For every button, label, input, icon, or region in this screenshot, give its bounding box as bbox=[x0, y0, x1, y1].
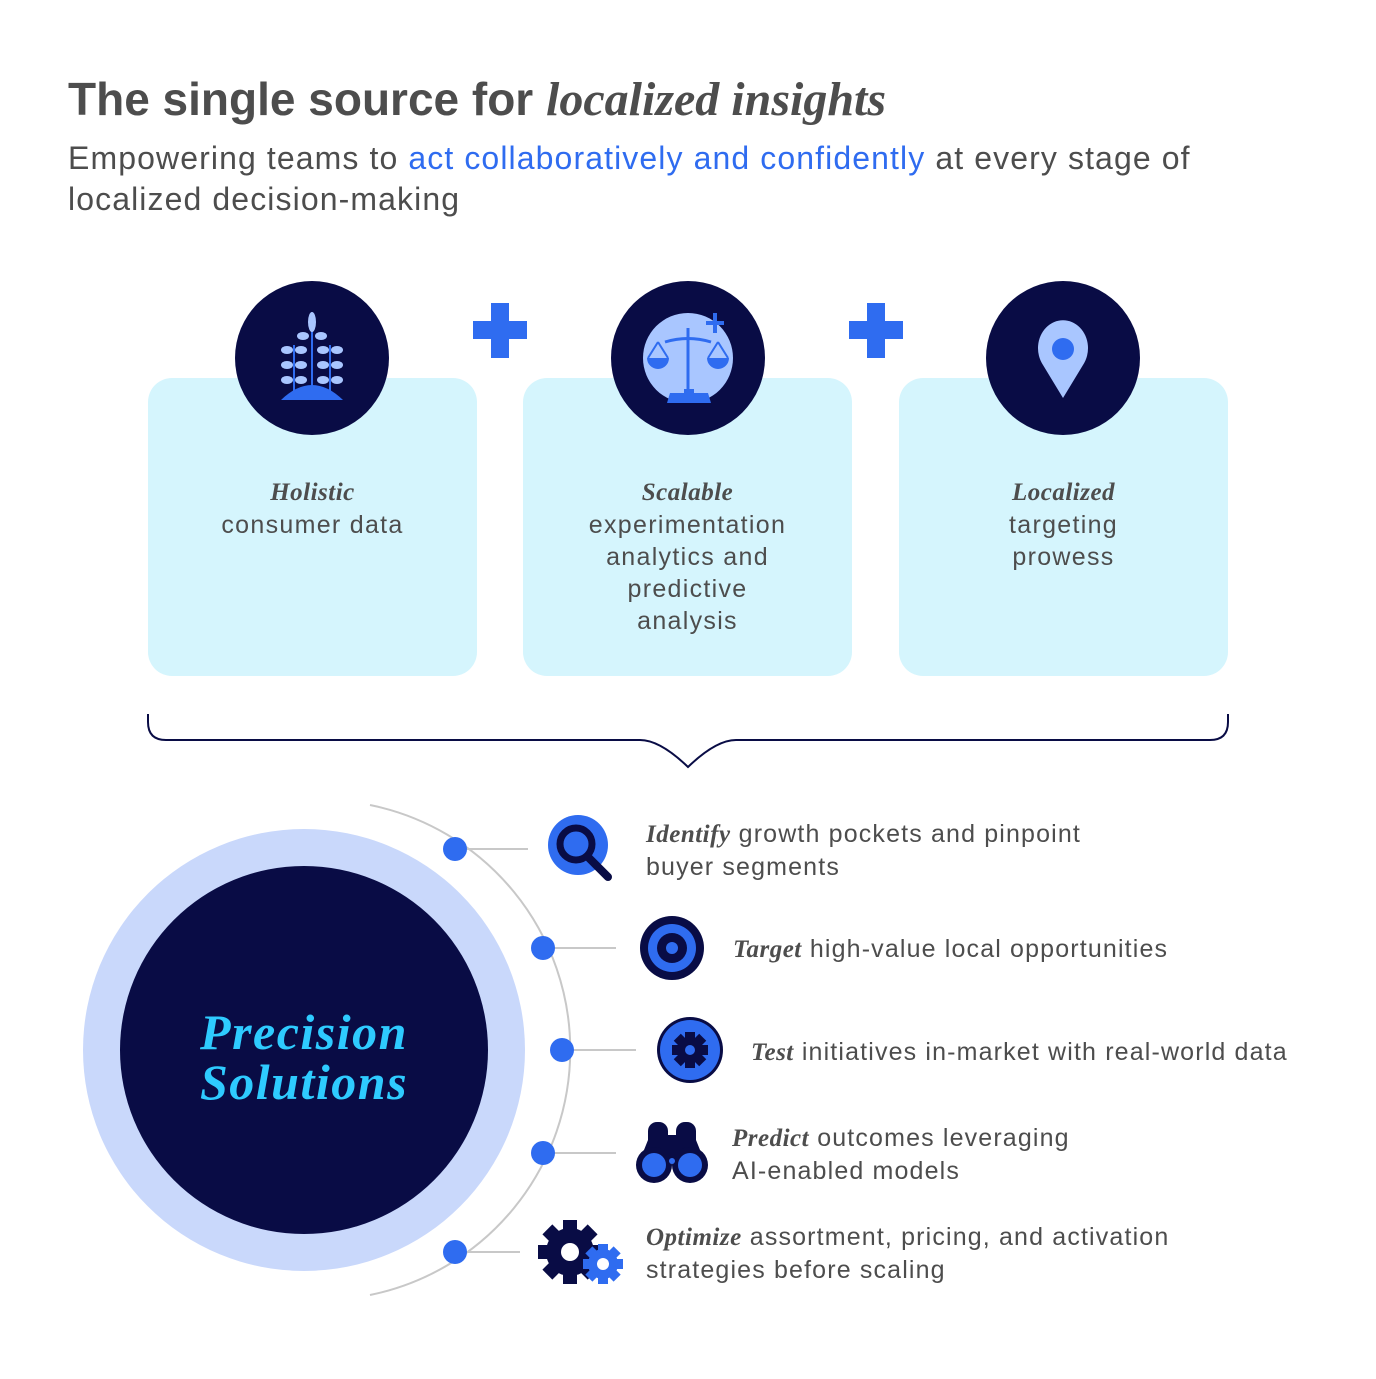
item: identify: buyer segments bbox=[646, 853, 840, 881]
precision circle: Solutions bbox=[200, 1054, 408, 1110]
icon: cycle gear bbox=[657, 1017, 723, 1083]
text: scalable: analysis bbox=[637, 607, 738, 635]
panel: localized bbox=[899, 378, 1228, 676]
item: predict: AI-enabled models bbox=[732, 1157, 960, 1185]
text: localized: Localized bbox=[1012, 479, 1115, 506]
icon: plus 2 bbox=[849, 303, 903, 358]
text: scalable: Scalable bbox=[642, 479, 733, 506]
item: optimize: Optimize assortment, pricing, and activation bbox=[646, 1223, 1169, 1251]
text: scalable: analytics and bbox=[606, 543, 769, 571]
text: scalable: experimentation bbox=[589, 511, 786, 539]
icon: plus 1 bbox=[473, 303, 527, 358]
text: holistic: consumer data bbox=[221, 511, 404, 539]
icon: scales bbox=[611, 281, 765, 435]
icon: gears bbox=[538, 1220, 623, 1284]
item: test: Test initiatives in-market with real-world data bbox=[751, 1038, 1288, 1066]
icon: map pin bbox=[986, 281, 1140, 435]
panel: holistic bbox=[148, 378, 477, 676]
title: The single source for localized insights bbox=[68, 73, 886, 126]
icon: plant bbox=[235, 281, 389, 435]
item: identify: Identify growth pockets and pinpoint bbox=[646, 820, 1081, 848]
dots bbox=[443, 837, 574, 1264]
text: scalable: predictive bbox=[628, 575, 748, 603]
icon: target bbox=[640, 916, 704, 980]
text: holistic: Holistic bbox=[270, 479, 355, 506]
item: predict: Predict outcomes leveraging bbox=[732, 1124, 1070, 1152]
item: optimize: strategies before scaling bbox=[646, 1256, 946, 1284]
item: predict bbox=[732, 1124, 1070, 1185]
subtitle: Empowering teams to act collaboratively and confidently at every stage of localized decision-making bbox=[68, 140, 1191, 217]
text: localized: targeting bbox=[1009, 511, 1118, 539]
item: target: Target high-value local opportunities bbox=[733, 935, 1168, 963]
brace bbox=[148, 714, 1228, 767]
item: identify bbox=[646, 820, 1081, 881]
precision circle: Precision bbox=[199, 1004, 408, 1060]
arc bbox=[370, 805, 570, 1295]
icon: binoculars bbox=[636, 1122, 708, 1183]
item: optimize bbox=[646, 1223, 1169, 1284]
text: localized: prowess bbox=[1012, 543, 1115, 571]
panel: scalable bbox=[523, 378, 852, 676]
text: localized bbox=[1009, 479, 1118, 571]
text: scalable bbox=[589, 479, 786, 635]
precision circle bbox=[83, 829, 525, 1271]
icon: magnifier bbox=[548, 815, 608, 877]
text: holistic bbox=[221, 479, 404, 539]
